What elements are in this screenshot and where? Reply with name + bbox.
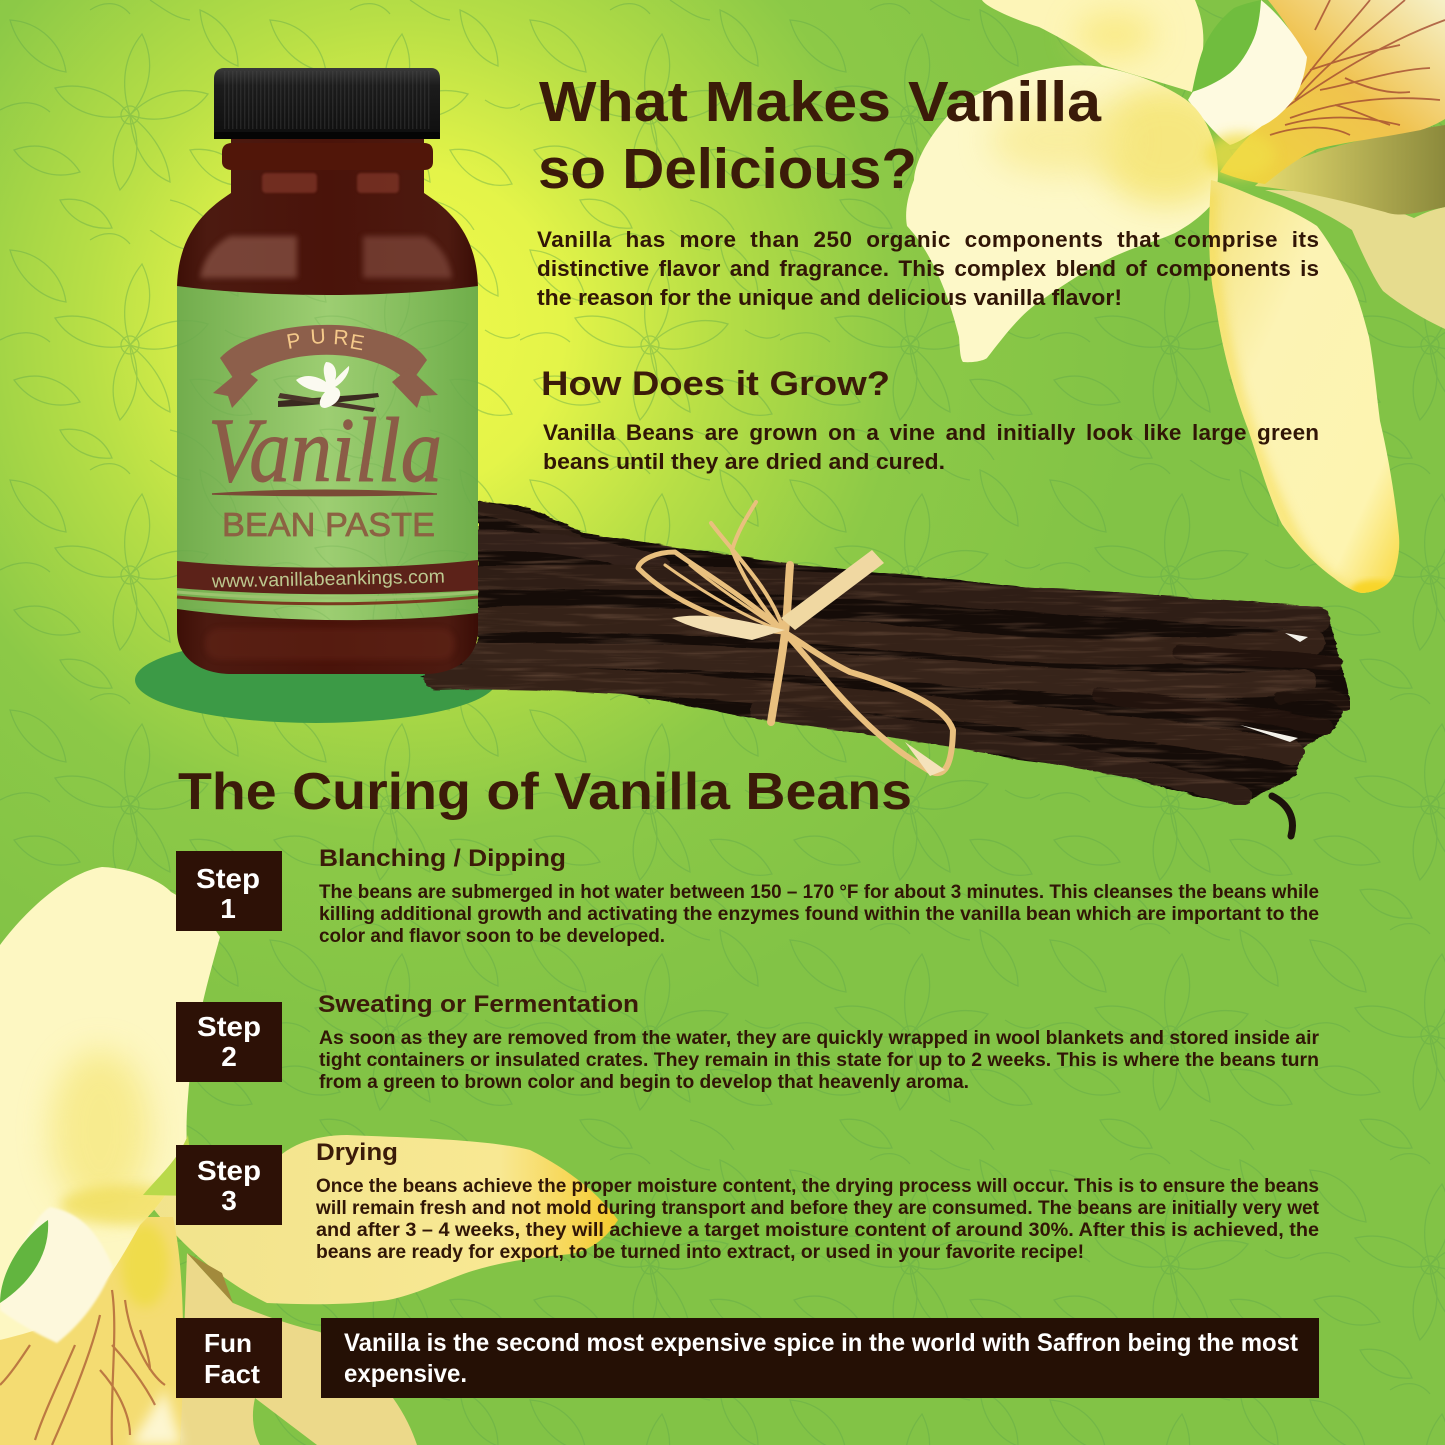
right olive sepal: [1265, 190, 1445, 329]
intro paragraph: distinctive flavor and fragrance. This complex blend of components is: [537, 256, 1319, 281]
fun fact badge: Fact: [204, 1359, 260, 1389]
fun fact callout: [321, 1318, 1319, 1398]
jar label: PURE: [285, 325, 366, 355]
step 3 text: [315, 1139, 1320, 1263]
label ribbon: pure: [213, 325, 438, 408]
step 3 text: and after 3 – 4 weeks, they will achieve a target moisture content of around 30%. After this is achieved, the: [316, 1220, 1319, 1241]
step 2 text: tight containers or insulated crates. They remain in this state for up to 2 weeks. This is where the beans turn: [319, 1050, 1319, 1071]
label icon: flower and beans: [278, 362, 379, 412]
lip with stripes: [1220, 0, 1445, 184]
illustration: bottom-left vanilla flower: [0, 867, 618, 1445]
step 1 text: color and flavor soon to be developed.: [319, 926, 665, 947]
title: [538, 70, 1102, 201]
step 2 text: As soon as they are removed from the water, they are quickly wrapped in wool blankets and stored inside air: [319, 1028, 1320, 1049]
fun fact callout: expensive.: [344, 1360, 467, 1388]
step 2 text: from a green to brown color and begin to develop that heavenly aroma.: [319, 1072, 969, 1093]
tail petal: [180, 1253, 417, 1445]
jar cap: [214, 68, 440, 139]
step 2 badge: 2: [221, 1041, 237, 1072]
long petal: [143, 1135, 618, 1304]
green gap: [0, 1220, 48, 1303]
title: What Makes Vanilla: [539, 70, 1102, 134]
section heading: curing: The Curing of Vanilla Beans: [178, 763, 912, 821]
illustration: top-right vanilla flower: [906, 0, 1445, 600]
heading: how does it grow: How Does it Grow?: [541, 365, 890, 403]
loose bean tail: [1272, 796, 1292, 836]
cream petal and green gap: [1188, 0, 1307, 145]
intro paragraph: [537, 227, 1319, 310]
cream inner petal: [0, 1207, 113, 1343]
step 1 badge: [176, 851, 282, 931]
step 3 badge: [176, 1145, 282, 1225]
title: so Delicious?: [538, 137, 917, 201]
label text: bean paste: BEAN PASTE: [222, 506, 435, 543]
lip: [0, 1217, 183, 1445]
step 3 text: Once the beans achieve the proper moisture content, the drying process will occur. This is to ensure the beans: [316, 1176, 1319, 1197]
grow paragraph: beans until they are dried and cured.: [543, 449, 945, 474]
upper sepal: [982, 0, 1203, 92]
step 1 text: killing additional growth and activating the enzymes found within the vanilla bean which are important to the: [319, 904, 1319, 925]
jar label: www.vanillabeankings.com: [211, 567, 445, 592]
fun fact callout: Vanilla is the second most expensive spice in the world with Saffron being the most: [344, 1329, 1299, 1357]
intro paragraph: Vanilla has more than 250 organic components that comprise its: [537, 227, 1319, 252]
grow paragraph: [543, 420, 1319, 474]
lower petal: [1209, 180, 1399, 593]
step 3 badge: 3: [221, 1185, 237, 1216]
step 3 text: will remain fresh and not mold during transport and before they are consumed. The beans are initially very wet: [315, 1198, 1320, 1219]
step 2 text: Sweating or Fermentation: [318, 991, 639, 1018]
step 2 text: [318, 991, 1320, 1093]
fun fact badge: [176, 1318, 282, 1398]
step 2 badge: Step: [197, 1011, 261, 1042]
step 1 text: The beans are submerged in hot water between 150 – 170 °F for about 3 minutes. This cleanses the beans while: [319, 882, 1319, 903]
label band: website: [177, 560, 478, 594]
raffia tie: [638, 502, 953, 773]
big upper petal: [0, 867, 220, 1340]
step 3 text: beans are ready for export, to be turned into extract, or used in your favorite recipe!: [316, 1242, 1084, 1263]
label script: vanilla: Vanilla: [208, 399, 442, 501]
step 3 badge: Step: [197, 1155, 261, 1186]
step 1 badge: Step: [196, 863, 260, 894]
fun fact badge: Fun: [204, 1328, 252, 1358]
step 1 text: Blanching / Dipping: [319, 845, 566, 872]
step 2 badge: [176, 1002, 282, 1082]
illustration: vanilla bean bundle: [420, 500, 1350, 836]
lime notch: [143, 1135, 196, 1196]
intro paragraph: the reason for the unique and delicious vanilla flavor!: [537, 285, 1122, 310]
jar body: [177, 136, 478, 674]
step 3 text: Drying: [316, 1139, 398, 1166]
big left petal: [906, 65, 1218, 362]
step 1 text: [319, 845, 1319, 947]
shadow ellipse under bottle: [135, 637, 497, 723]
jar label: [177, 286, 478, 620]
product: vanilla bean paste jar: [177, 68, 478, 674]
step 1 badge: 1: [220, 893, 236, 924]
grow paragraph: Vanilla Beans are grown on a vine and initially look like large green: [543, 420, 1319, 445]
center: [1205, 133, 1275, 177]
